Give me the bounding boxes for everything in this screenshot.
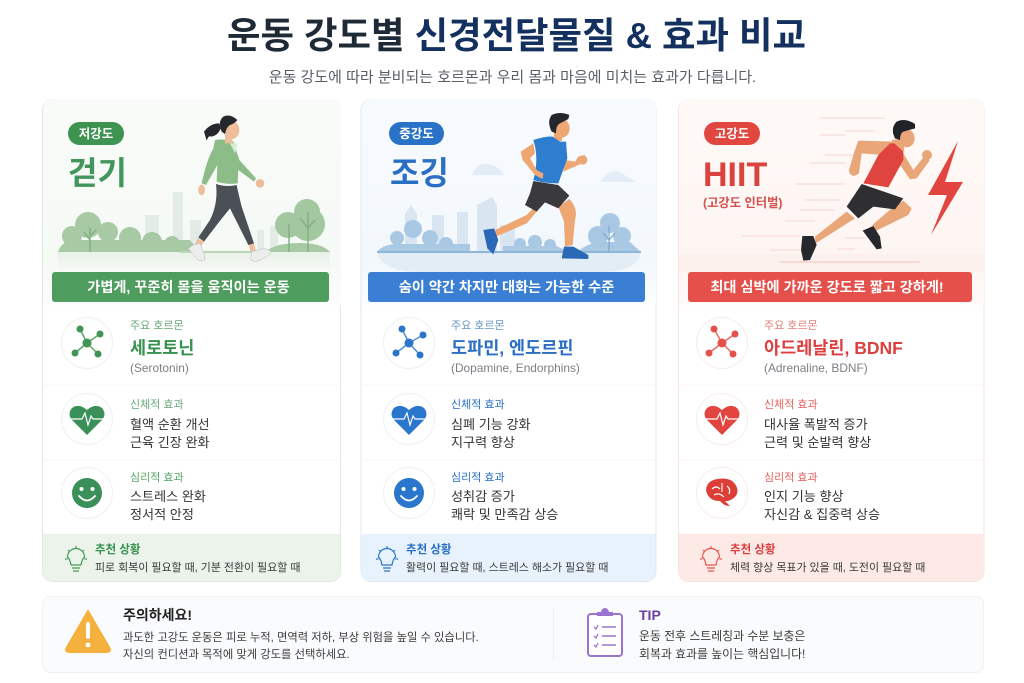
row: psychological effect: 심리적 효과 (451, 471, 505, 484)
row: psychological effect: 쾌락 및 만족감 상승 (451, 507, 558, 522)
row: physical effect: 혈액 순환 개선 (130, 417, 210, 432)
row: main hormone: 도파민, 엔도르핀 (451, 338, 573, 358)
icon: smiley (384, 468, 434, 518)
icon: warning triangle (66, 611, 110, 652)
recommendation: 활력이 필요할 때, 스트레스 해소가 필요할 때 (406, 560, 608, 574)
tip block (588, 607, 805, 661)
icon: molecule (62, 318, 112, 368)
recommendation (362, 534, 656, 581)
row: main hormone (696, 318, 903, 375)
row: psychological effect: 정서적 안정 (130, 507, 194, 522)
panel: low intensity walking (42, 99, 341, 582)
row: physical effect: 근력 및 순발력 향상 (764, 435, 871, 450)
icon: heart (696, 394, 748, 444)
tip block: 운동 전후 스트레칭과 수분 보충은 (639, 629, 805, 643)
badge: 저강도 (68, 122, 124, 145)
subtitle: 운동 강도에 따라 분비되는 호르몬과 우리 몸과 마음에 미치는 효과가 다릅니다. (269, 69, 756, 86)
badge: 고강도: 고강도 (715, 127, 749, 141)
row: main hormone: (Serotonin) (130, 361, 189, 375)
row: main hormone: 세로토닌 (130, 338, 194, 358)
icon: molecule (696, 318, 748, 368)
tip block: 회복과 효과를 높이는 핵심입니다! (639, 647, 805, 661)
recommendation (43, 534, 340, 581)
icon: lightning bolt (928, 141, 963, 235)
banner (368, 272, 645, 302)
row: physical effect: 신체적 효과 (130, 398, 184, 411)
icon: molecule (384, 318, 434, 368)
row: main hormone: 주요 호르몬 (764, 319, 818, 332)
row: main hormone: 주요 호르몬 (451, 319, 505, 332)
row: main hormone: 아드레날린, BDNF (764, 338, 903, 358)
banner (52, 272, 329, 302)
row: physical effect (384, 394, 531, 450)
row: main hormone: 주요 호르몬 (130, 319, 184, 332)
row: main hormone (384, 318, 580, 375)
badge: 고강도 (704, 122, 760, 145)
row: main hormone: (Dopamine, Endorphins) (451, 361, 580, 375)
panel: high intensity HIIT (678, 99, 984, 582)
row: psychological effect (62, 468, 206, 522)
illustration: jogging man in city (377, 113, 641, 272)
recommendation: 추천 상황 (406, 542, 452, 556)
row: physical effect (62, 394, 210, 450)
icon: clipboard checklist (588, 608, 622, 656)
caution block: 과도한 고강도 운동은 피로 누적, 면역력 저하, 부상 위험을 높일 수 있습니다. (123, 630, 479, 644)
recommendation (679, 534, 984, 581)
icon: smiley (62, 468, 112, 518)
badge: 중강도 (389, 122, 444, 145)
row: psychological effect: 인지 기능 향상 (764, 489, 844, 504)
illustration: walking woman in park (58, 116, 330, 270)
row: psychological effect (384, 468, 558, 522)
badge: 저강도: 저강도 (79, 126, 113, 141)
row: physical effect: 신체적 효과 (451, 398, 505, 411)
row: physical effect: 근육 긴장 완화 (130, 435, 210, 450)
panel: caution and tip (42, 596, 984, 672)
icon: heart (62, 394, 112, 444)
row: physical effect: 심폐 기능 강화 (451, 417, 531, 432)
row: physical effect: 지구력 향상 (451, 435, 515, 450)
row: physical effect: 대사율 폭발적 증가 (764, 417, 868, 432)
heading: HIIT: HIIT (703, 156, 767, 194)
title: 운동 강도별 신경전달물질 & 효과 비교 (227, 15, 806, 56)
row: psychological effect: 심리적 효과 (130, 471, 184, 484)
row: psychological effect: 성취감 증가 (451, 489, 515, 504)
caution block: 주의하세요! (123, 607, 192, 623)
icon: light bulb (376, 546, 398, 571)
subheading: (고강도 인터벌) (703, 196, 782, 210)
caution block: 자신의 컨디션과 목적에 맞게 강도를 선택하세요. (123, 647, 350, 661)
caution block (66, 607, 479, 661)
banner: 가볍게, 꾸준히 몸을 움직이는 운동 (87, 280, 290, 296)
recommendation: 피로 회복이 필요할 때, 기분 전환이 필요할 때 (95, 561, 300, 574)
icon: light bulb (700, 546, 722, 571)
illustration: sprinting man with lightning (679, 118, 984, 272)
recommendation: 추천 상황 (95, 542, 141, 556)
row: psychological effect: 스트레스 완화 (130, 489, 206, 504)
tip block: TIP (639, 607, 661, 623)
row: psychological effect (696, 468, 880, 522)
row: psychological effect: 심리적 효과 (764, 471, 818, 484)
row: main hormone: (Adrenaline, BDNF) (764, 361, 868, 375)
banner: 최대 심박에 가까운 강도로 짧고 강하게! (710, 280, 944, 296)
panel: moderate intensity jogging (361, 99, 656, 582)
recommendation: 추천 상황 (730, 542, 776, 556)
row: physical effect: 신체적 효과 (764, 398, 818, 411)
banner (688, 272, 972, 302)
heading: 조깅: 조깅 (390, 155, 449, 191)
row: physical effect (696, 394, 871, 450)
recommendation: 체력 향상 목표가 있을 때, 도전이 필요할 때 (730, 561, 925, 574)
row: main hormone (62, 318, 194, 375)
heading: 걷기: 걷기 (68, 155, 127, 191)
row: psychological effect: 자신감 & 집중력 상승 (764, 507, 880, 522)
icon: light bulb (65, 546, 87, 571)
badge: 중강도: 중강도 (399, 127, 434, 141)
icon: heart (384, 394, 434, 444)
banner: 숨이 약간 차지만 대화는 가능한 수준 (399, 280, 614, 296)
icon: brain (696, 468, 748, 518)
